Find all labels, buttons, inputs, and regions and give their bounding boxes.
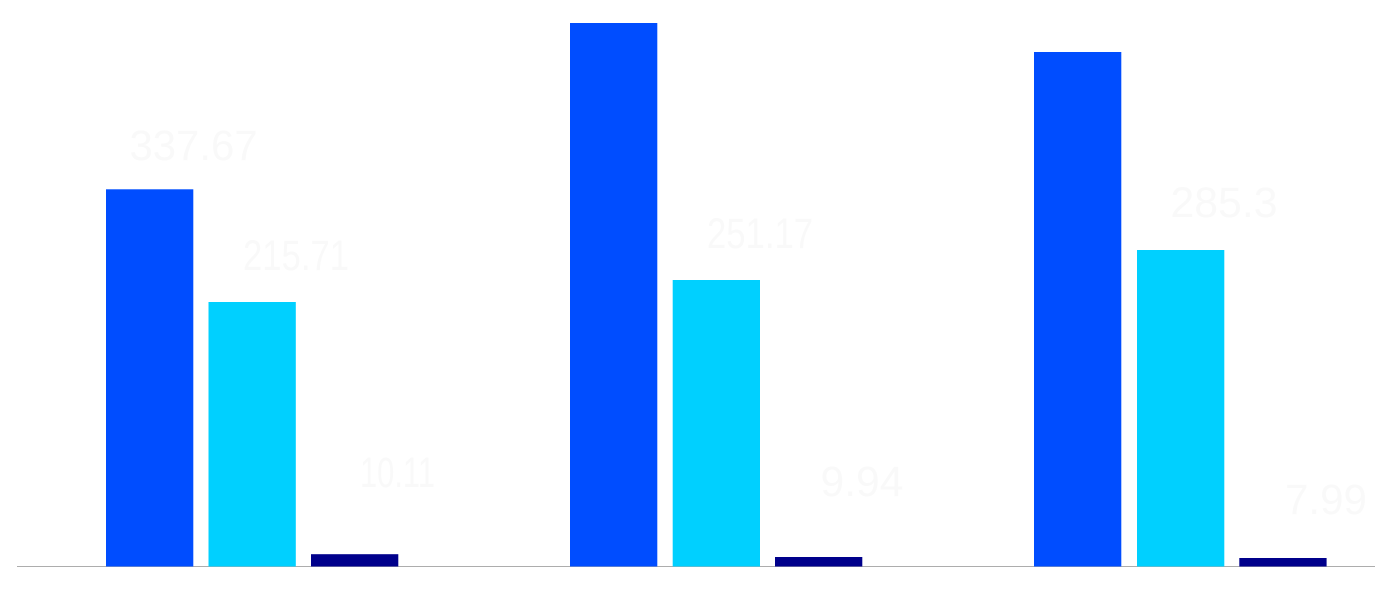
bar: first series, group 3 [1034, 52, 1121, 566]
value label: 215.71: 215.71 [243, 232, 349, 280]
value label: 7.99: 7.99 [1285, 476, 1367, 524]
bar: 7.99 [1239, 558, 1327, 566]
value label: 10.11: 10.11 [360, 449, 435, 497]
bar: 285.3 [1137, 250, 1224, 566]
group 1 [106, 122, 435, 566]
value label: 285.3: 285.3 [1170, 179, 1278, 227]
value label: 251.17: 251.17 [707, 210, 813, 258]
baseline axis [17, 566, 1375, 567]
bar: first series, group 2 [570, 23, 657, 566]
bar: 9.94 [775, 557, 862, 566]
bar: 215.71 [208, 302, 296, 566]
value label: 9.94: 9.94 [820, 458, 904, 506]
value label: 337.67: 337.67 [130, 122, 258, 170]
bar: 251.17 [673, 280, 760, 566]
bar: 10.11 [311, 554, 398, 566]
group 2 [570, 23, 904, 566]
group 3 [1034, 52, 1367, 566]
bar: 337.67 [106, 189, 193, 567]
